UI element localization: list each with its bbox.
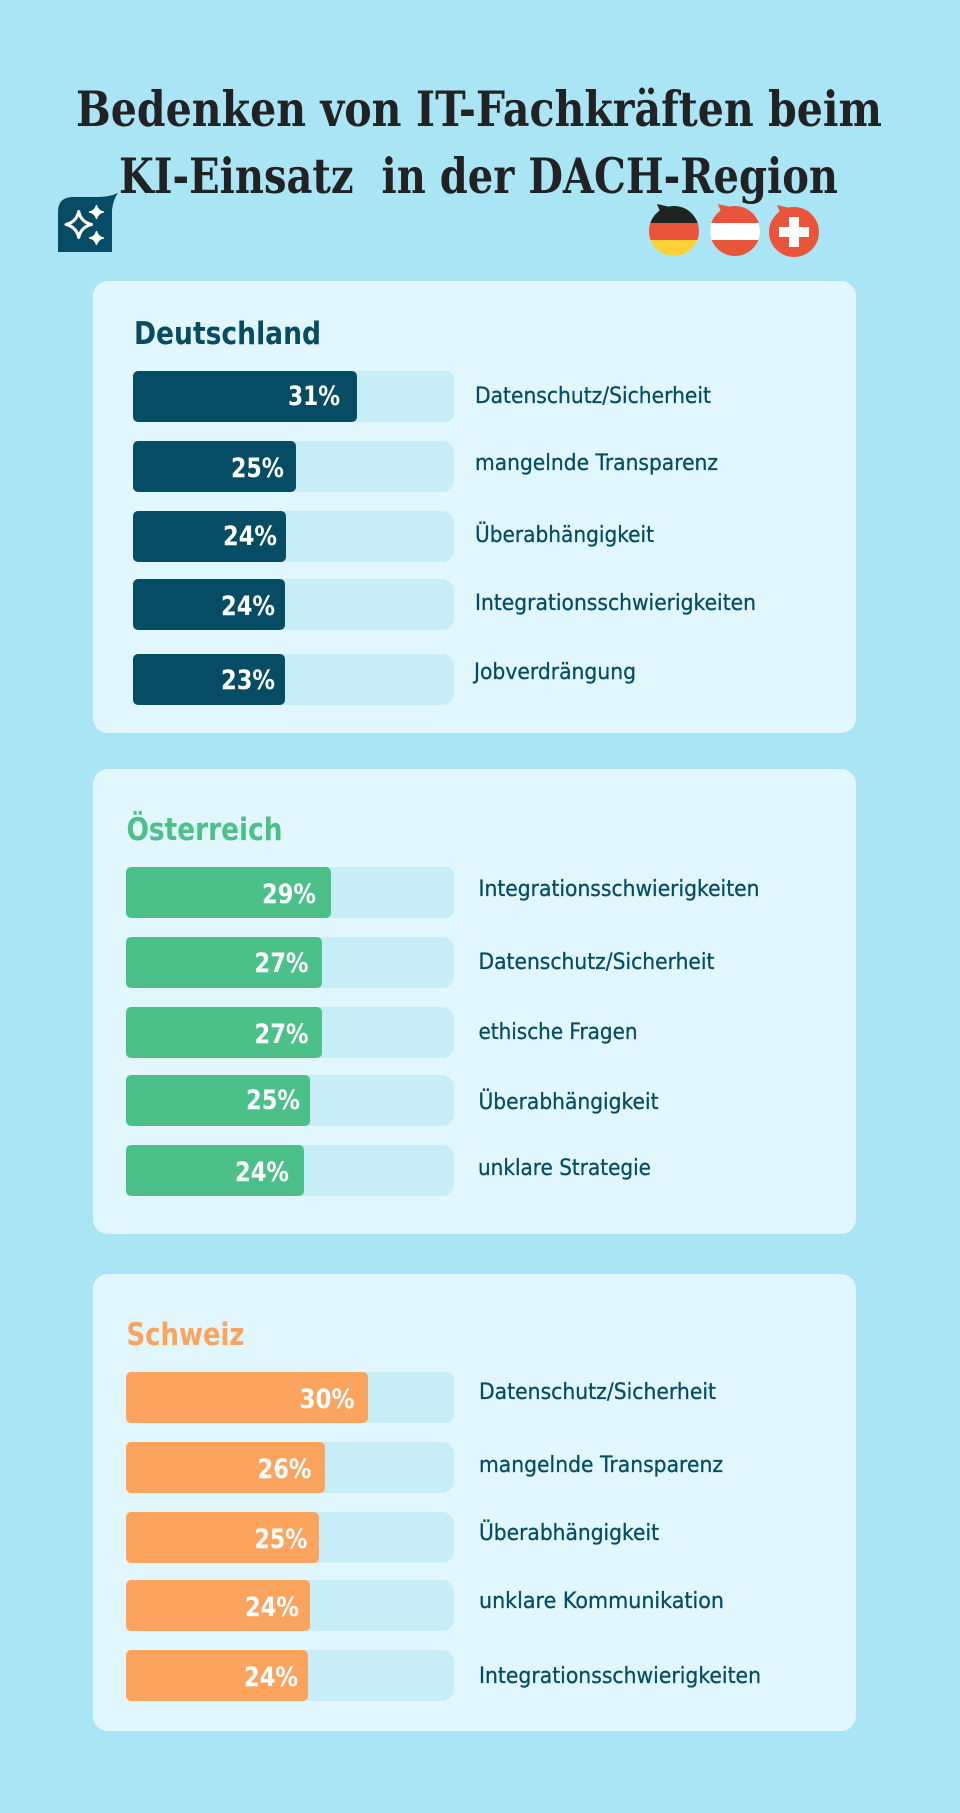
bar: Integrationsschwierigkeiten 24% (126, 1650, 761, 1701)
bar: mangelnde Transparenz 26% (126, 1442, 723, 1493)
bar: Datenschutz/Sicherheit 31%: 31% (288, 381, 340, 412)
panel: Deutschland (93, 281, 856, 733)
bar: Überabhängigkeit 25%: Überabhängigkeit (479, 1520, 659, 1546)
bar: mangelnde Transparenz 25%: mangelnde Transparenz (475, 451, 718, 476)
bar: Datenschutz/Sicherheit 27%: 27% (254, 948, 308, 979)
bar: Jobverdrängung 23%: 23% (221, 665, 275, 696)
bar: ethische Fragen 27%: ethische Fragen (478, 1020, 638, 1045)
bar: Überabhängigkeit 24% (133, 511, 654, 562)
bar: ethische Fragen 27% (126, 1007, 638, 1058)
panel: Österreich (93, 769, 856, 1234)
bar: Datenschutz/Sicherheit 31% (133, 371, 711, 422)
bar: Integrationsschwierigkeiten 24%: 24% (221, 591, 275, 622)
bar: unklare Kommunikation 24%: unklare Kommunikation (479, 1589, 724, 1614)
icon: flag of Germany (649, 204, 699, 256)
bar: Datenschutz/Sicherheit 30% (126, 1372, 716, 1423)
bar: Integrationsschwierigkeiten 29%: 29% (262, 879, 316, 910)
bar: Jobverdrängung 23% (133, 654, 636, 705)
panel: Schweiz (93, 1274, 856, 1731)
bar: Überabhängigkeit 25%: 25% (254, 1524, 308, 1555)
bar: mangelnde Transparenz 26%: 26% (258, 1454, 312, 1485)
title (76, 80, 882, 205)
icon: flag of Austria (710, 204, 760, 256)
bar: Überabhängigkeit 25%: 25% (246, 1085, 300, 1116)
bar: unklare Strategie 24%: unklare Strategie (478, 1156, 651, 1181)
bar: Integrationsschwierigkeiten 24% (133, 579, 756, 630)
bar: Integrationsschwierigkeiten 24%: Integrationsschwierigkeiten (479, 1664, 761, 1689)
bar: Datenschutz/Sicherheit 27% (126, 937, 715, 988)
bar: Integrationsschwierigkeiten 24%: Integrationsschwierigkeiten (475, 591, 756, 616)
heading: Österreich: Österreich (126, 811, 282, 848)
bar: mangelnde Transparenz 25%: 25% (231, 453, 284, 484)
bar: Überabhängigkeit 24%: Überabhängigkeit (475, 522, 654, 548)
heading: Schweiz: Schweiz (126, 1317, 244, 1353)
bar: unklare Strategie 24%: 24% (235, 1157, 289, 1188)
bar: Integrationsschwierigkeiten 29% (126, 867, 760, 918)
bar: Integrationsschwierigkeiten 29%: Integrationsschwierigkeiten (478, 877, 760, 902)
bar: Datenschutz/Sicherheit 30%: 30% (300, 1384, 354, 1415)
icon: flag of Switzerland (769, 205, 819, 257)
bar: unklare Strategie 24% (126, 1145, 651, 1196)
bar: Datenschutz/Sicherheit 30%: Datenschutz/Sicherheit (479, 1380, 716, 1405)
bar: Datenschutz/Sicherheit 27%: Datenschutz/Sicherheit (478, 950, 715, 975)
bar: mangelnde Transparenz 26%: mangelnde Transparenz (479, 1453, 723, 1478)
bar: mangelnde Transparenz 25% (133, 441, 718, 492)
bar: Überabhängigkeit 25%: Überabhängigkeit (478, 1089, 659, 1115)
heading: Deutschland: Deutschland (134, 316, 321, 352)
bar: Überabhängigkeit 25% (126, 1512, 659, 1563)
bar: unklare Kommunikation 24%: 24% (245, 1592, 299, 1623)
bar: Überabhängigkeit 24%: 24% (223, 521, 277, 552)
bar: Jobverdrängung 23%: Jobverdrängung (472, 660, 636, 685)
bar: Überabhängigkeit 25% (126, 1075, 659, 1126)
icon: sparkle speech bubble (58, 193, 118, 252)
bar: Integrationsschwierigkeiten 24%: 24% (244, 1662, 298, 1693)
bar: unklare Kommunikation 24% (126, 1580, 724, 1631)
bar: Datenschutz/Sicherheit 31%: Datenschutz/Sicherheit (475, 384, 711, 409)
bar: ethische Fragen 27%: 27% (254, 1019, 308, 1050)
